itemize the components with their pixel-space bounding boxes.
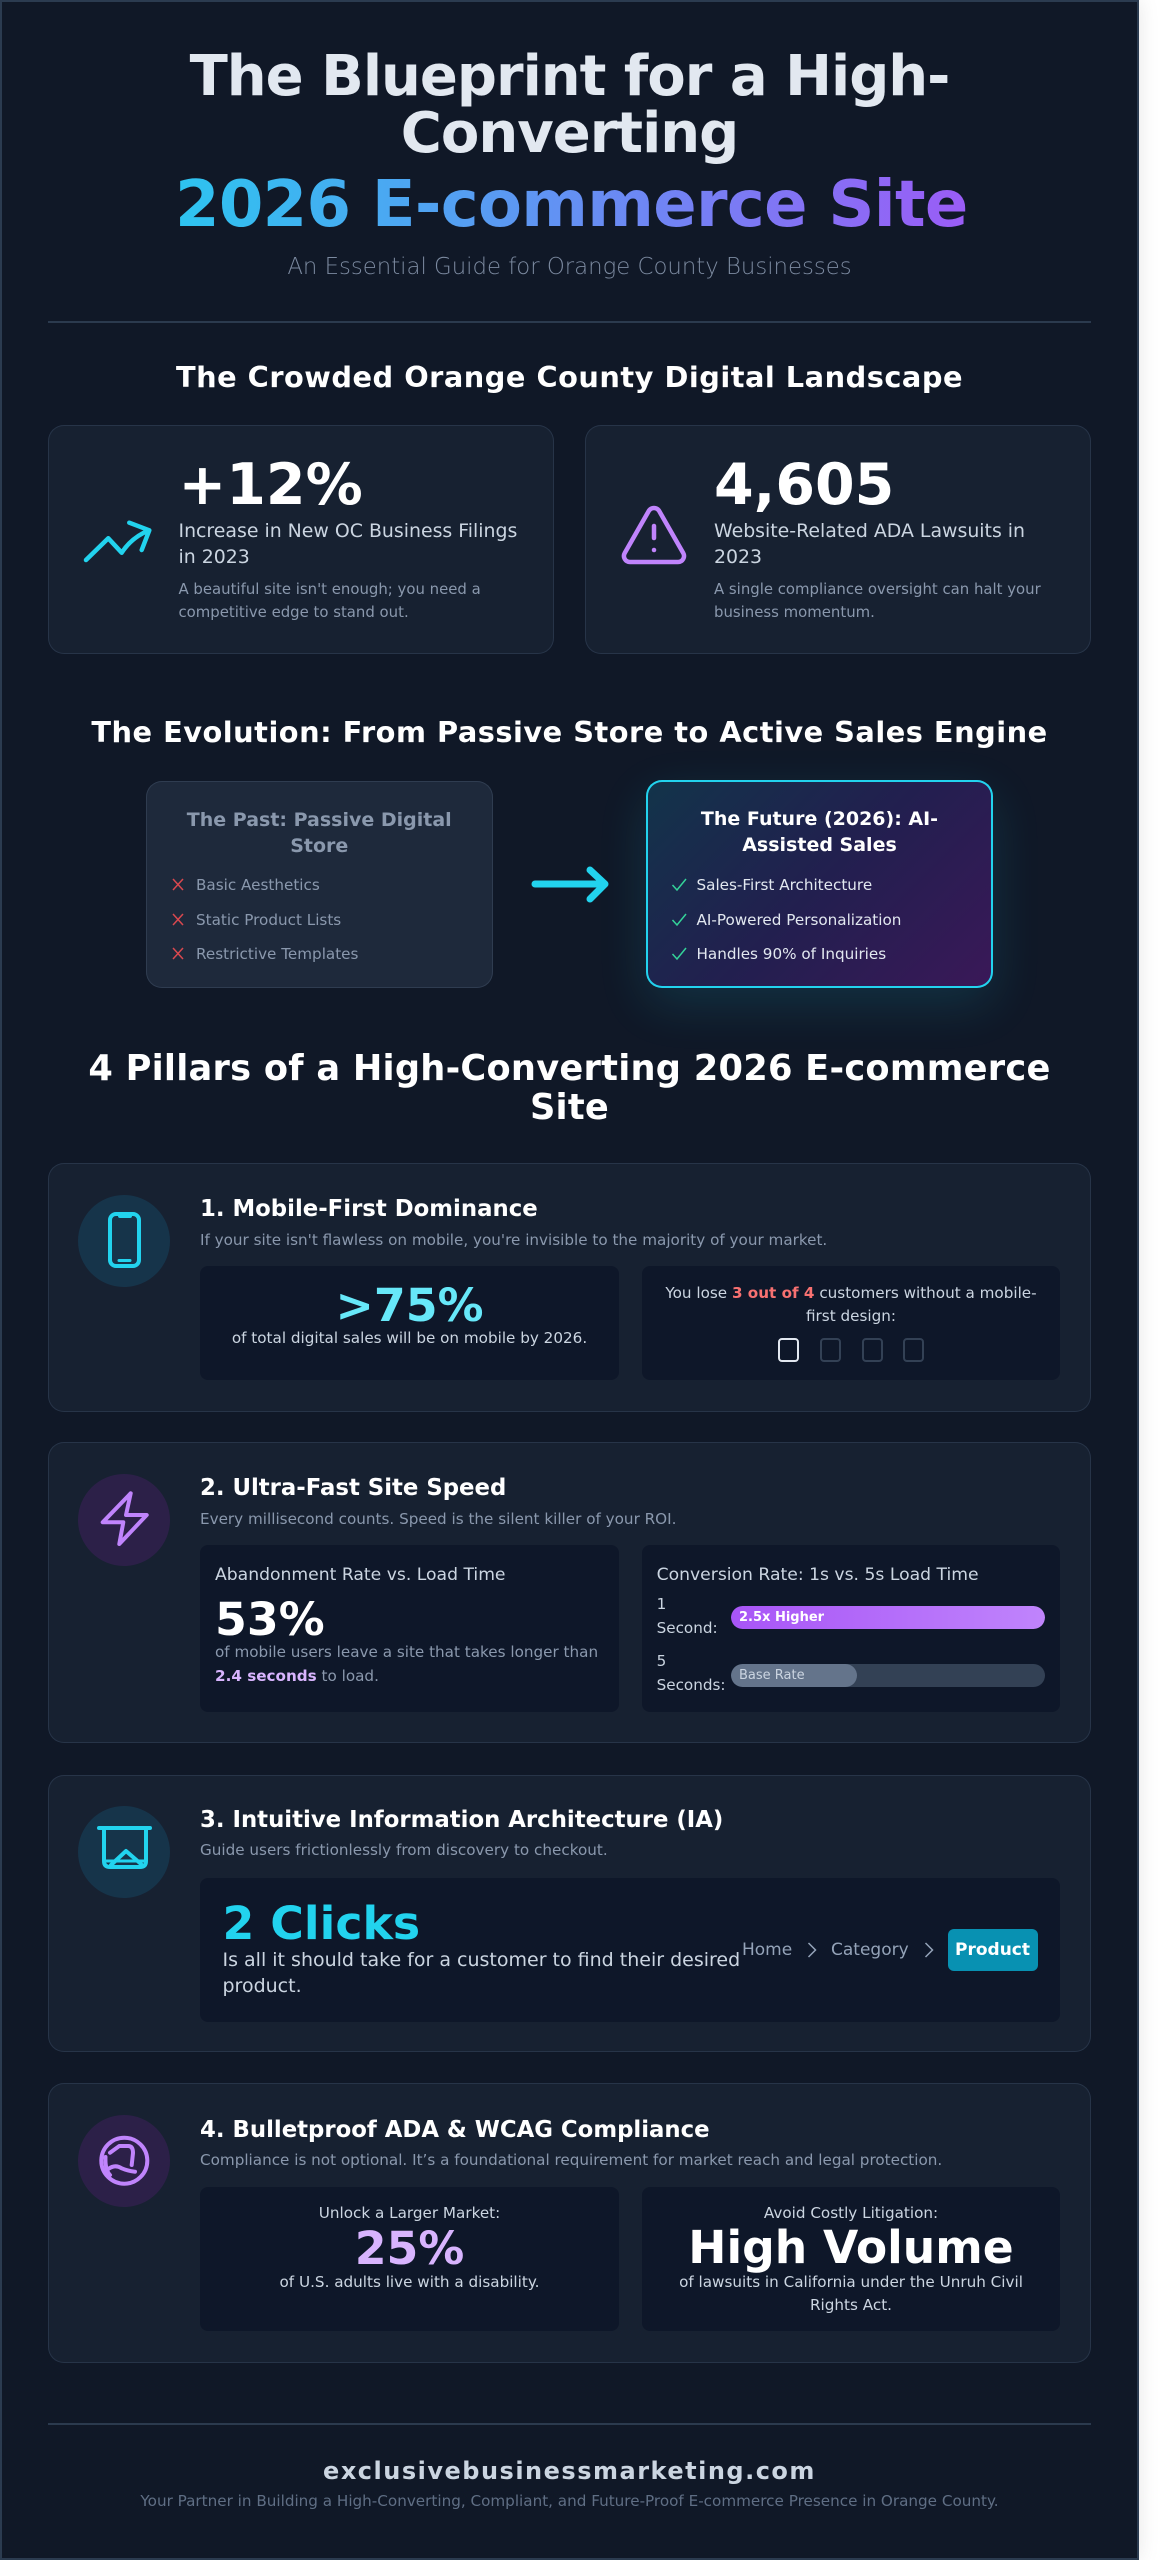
list item: Basic Aesthetics <box>196 876 320 894</box>
stat note: competitive edge to stand out. <box>178 603 409 621</box>
future title <box>700 808 938 856</box>
stat caption: Rights Act. <box>810 2296 892 2314</box>
stat number: High Volume <box>688 2221 1014 2274</box>
heading: pillars: 4 Pillars of a High-Converting 2026 E-commerce <box>88 1048 1051 1089</box>
stat note: business momentum. <box>714 603 875 621</box>
stat caption: product. <box>222 1975 302 1997</box>
bar: 5 seconds: Base Rate <box>739 1668 805 1682</box>
heading: landscape: The Crowded Orange County Digital Landscape <box>176 360 963 394</box>
pillar description: If your site isn't flawless on mobile, you're invisible to the majority of your market. <box>200 1231 827 1249</box>
lost customers text: You lose 3 out of 4 customers without a mobile- <box>665 1284 1037 1302</box>
panel: pillar 2 speed <box>48 1442 1091 1743</box>
panel: the future <box>646 780 993 988</box>
list item: Sales-First Architecture <box>696 876 872 894</box>
list item: Static Product Lists <box>196 910 341 928</box>
stat caption: of total digital sales will be on mobile by 2026. <box>232 1329 587 1347</box>
stat note <box>178 580 481 621</box>
future title: Assisted Sales <box>742 834 897 856</box>
title highlight: 2026 E-commerce Site <box>175 168 968 242</box>
bar: 5 seconds <box>731 1664 1045 1686</box>
icon: chevron <box>808 1942 816 1958</box>
phone pictogram row <box>778 1338 924 1362</box>
stat note <box>714 580 1041 621</box>
bar: 1 second <box>731 1606 1045 1629</box>
stat box: two clicks <box>200 1878 1060 2022</box>
breadcrumb step: category: Category <box>831 1940 909 1960</box>
stat box: abandonment <box>200 1545 619 1712</box>
stat caption <box>222 1949 740 1997</box>
breadcrumb step: home: Home <box>742 1940 792 1960</box>
stat caption: of lawsuits in California under the Unruh Civil <box>679 2272 1023 2290</box>
stat number: +12% <box>178 452 363 518</box>
pillar heading: 3. Intuitive Information Architecture (IA) <box>200 1807 723 1833</box>
icon: presentation screen <box>78 1806 170 1898</box>
heading: pillars <box>88 1048 1051 1128</box>
stat label: 2023 <box>714 546 762 568</box>
past title <box>186 808 452 857</box>
panel: pillar 3 information architecture <box>48 1775 1091 2052</box>
list item: Restrictive Templates <box>196 944 358 962</box>
stat caption: of mobile users leave a site that takes longer than <box>215 1643 598 1661</box>
box title: Conversion Rate: 1s vs. 5s Load Time <box>657 1565 979 1585</box>
stat label: Increase in New OC Business Filings <box>178 520 517 542</box>
pillar heading: 1. Mobile-First Dominance <box>200 1196 538 1222</box>
panel: business filings stat <box>48 425 554 654</box>
stat label <box>178 520 517 568</box>
icon: trending up <box>84 520 152 562</box>
heading: pillars: Site <box>530 1086 609 1128</box>
panel: ADA lawsuits stat <box>585 425 1091 654</box>
pillar description: Every millisecond counts. Speed is the silent killer of your ROI. <box>200 1510 676 1528</box>
arrow: past to future <box>532 866 608 902</box>
icon: warning triangle <box>622 506 686 564</box>
breadcrumb step: product <box>948 1929 1038 1971</box>
stat note: A beautiful site isn't enough; you need a <box>178 580 481 598</box>
box title: Abandonment Rate vs. Load Time <box>215 1565 506 1585</box>
breadcrumb step: product: Product <box>955 1940 1030 1960</box>
bar: 1 second: 2.5x Higher <box>739 1610 824 1625</box>
stat label <box>714 520 1025 568</box>
stat number: 4,605 <box>714 452 894 518</box>
stat caption: of U.S. adults live with a disability. <box>280 2273 539 2291</box>
bar label: 5 <box>657 1652 666 1670</box>
pillar description: Compliance is not optional. It’s a foundational requirement for market reach and legal protection. <box>200 2151 942 2169</box>
title: Converting <box>401 101 738 166</box>
pillar heading: 4. Bulletproof ADA & WCAG Compliance <box>200 2117 710 2143</box>
bar label: 1 <box>657 1595 666 1613</box>
bar label <box>657 1595 718 1636</box>
panel: pillar 4 compliance <box>48 2083 1091 2363</box>
stat box: lost customers <box>642 1266 1060 1380</box>
stat number: 25% <box>355 2221 464 2275</box>
stat caption <box>679 2272 1023 2314</box>
heading: evolution: The Evolution: From Passive Store to Active Sales Engine <box>91 715 1048 749</box>
stat note: A single compliance oversight can halt your <box>714 580 1041 598</box>
stat number: 53% <box>215 1592 325 1646</box>
bar label: Second: <box>657 1618 718 1636</box>
box label: Unlock a Larger Market: <box>319 2204 500 2222</box>
stat box: larger market <box>200 2187 619 2331</box>
stat caption <box>215 1643 598 1684</box>
bar label: Seconds: <box>657 1676 726 1694</box>
past title: The Past: Passive Digital <box>187 808 452 830</box>
icon: chevron <box>925 1942 934 1958</box>
icon: lightning bolt <box>78 1474 170 1566</box>
icon: smartphone <box>78 1195 170 1287</box>
bar label <box>657 1652 726 1694</box>
pillar description: Guide users frictionlessly from discovery to checkout. <box>200 1841 608 1859</box>
panel: the past <box>146 781 493 988</box>
icon: accessibility <box>78 2115 170 2207</box>
stat caption: Is all it should take for a customer to find their desired <box>222 1949 740 1971</box>
stat label: in 2023 <box>178 546 250 568</box>
pillar heading: 2. Ultra-Fast Site Speed <box>200 1474 506 1500</box>
lost customers text <box>665 1284 1037 1325</box>
stat caption: 2.4 seconds to load. <box>215 1666 379 1684</box>
lost customers text: first design: <box>806 1307 896 1325</box>
stat box: conversion bar chart <box>642 1545 1060 1712</box>
stat box: mobile sales <box>200 1266 619 1380</box>
stat number: >75% <box>336 1278 484 1332</box>
footer tagline: Your Partner in Building a High-Converting, Compliant, and Future-Proof E-commerce Presence in Orange County. <box>140 2492 999 2510</box>
stat number: 2 Clicks <box>222 1896 420 1950</box>
panel: pillar 1 mobile <box>48 1163 1091 1412</box>
list item: Handles 90% of Inquiries <box>696 944 886 962</box>
box label: Avoid Costly Litigation: <box>764 2204 938 2222</box>
future title: The Future (2026): AI- <box>701 808 938 830</box>
title <box>190 44 949 166</box>
list item: AI-Powered Personalization <box>696 910 901 928</box>
title: The Blueprint for a High- <box>190 44 949 109</box>
past title: Store <box>290 835 348 857</box>
stat box: litigation <box>642 2187 1060 2331</box>
footer domain: exclusivebusinessmarketing.com <box>323 2457 816 2485</box>
subtitle: An Essential Guide for Orange County Businesses <box>287 254 852 280</box>
stat label: Website-Related ADA Lawsuits in <box>714 520 1025 542</box>
